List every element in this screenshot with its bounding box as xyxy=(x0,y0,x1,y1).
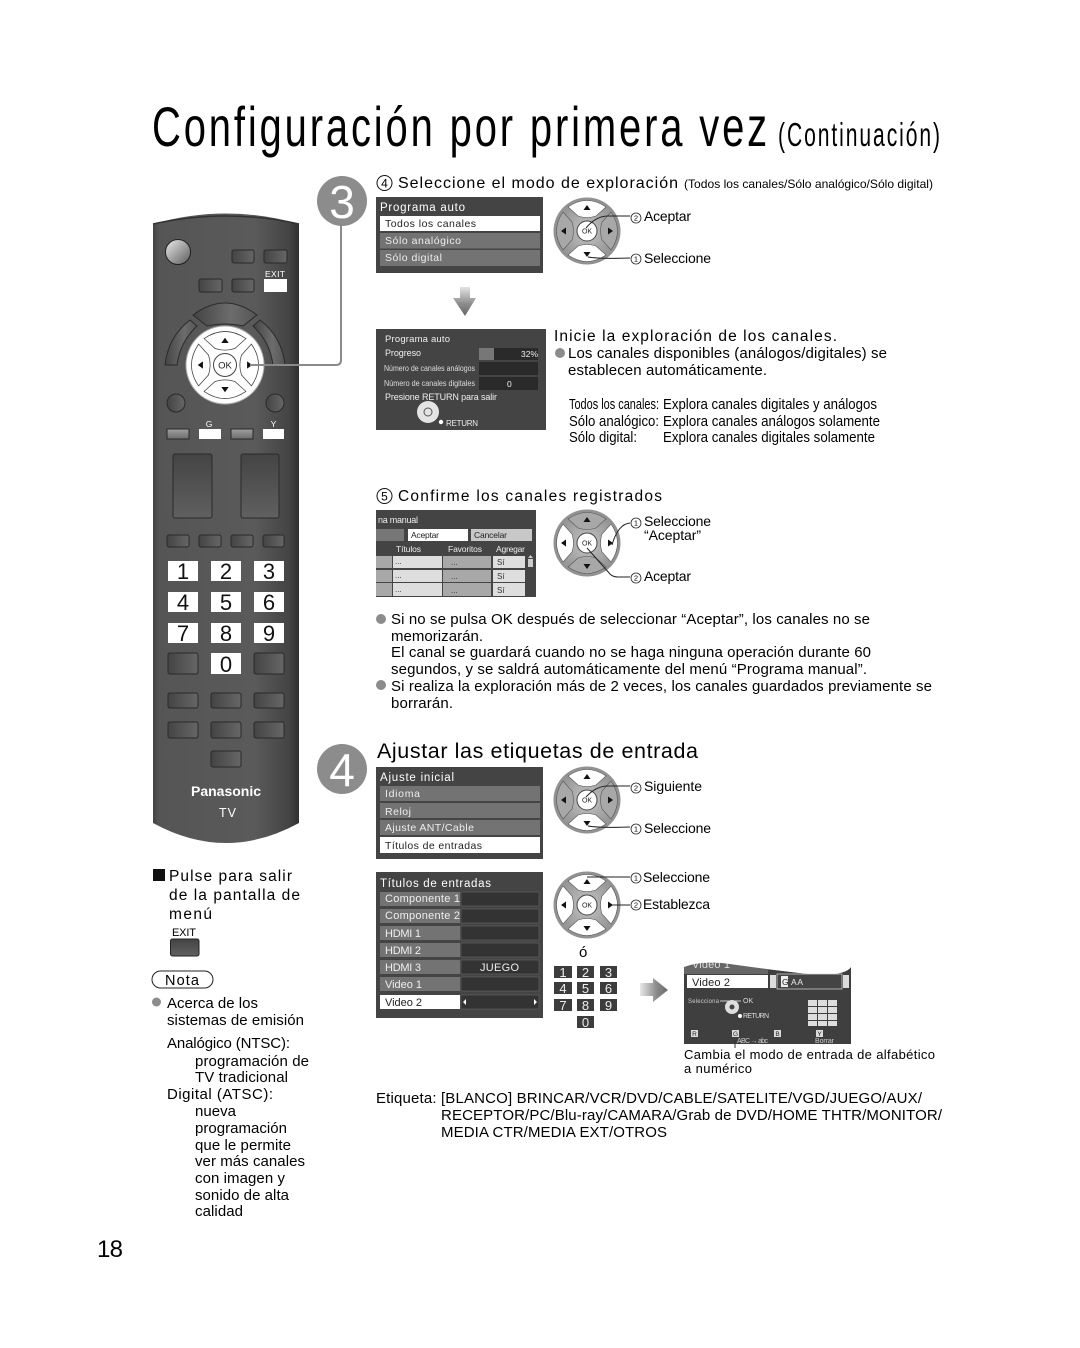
panel: manual program table: ... xyxy=(451,586,458,595)
callout: Aceptar: 2 xyxy=(634,574,638,582)
note badge: Nota xyxy=(165,973,200,989)
panel: Ajuste inicial menu: Ajuste ANT/Cable xyxy=(385,822,474,834)
text block: notes: Si realiza la exploración más de 2 veces, los canales guardados previamente se xyxy=(391,678,932,695)
text block: scan options xyxy=(569,396,880,446)
alternative text: ó xyxy=(579,944,587,961)
icon: dpad label edit: OK xyxy=(582,902,592,910)
panel: Programa auto menu: Sólo digital xyxy=(385,252,442,264)
step 4 badge xyxy=(317,744,367,796)
icon: dpad step 3: OK xyxy=(582,228,592,236)
text block: broadcast systems note xyxy=(152,995,309,1220)
text block: broadcast systems note: programación de xyxy=(195,1053,309,1070)
number keypad: 6 xyxy=(605,981,612,996)
text block: broadcast systems note: Acerca de los xyxy=(167,995,258,1012)
panel: Ajuste inicial menu: Títulos de entradas xyxy=(385,840,482,852)
text block: broadcast systems note: TV tradicional xyxy=(195,1069,288,1086)
panel: Títulos de entradas menu: HDMI 3 xyxy=(385,962,421,974)
text block: scan options: Explora canales digitales solamente xyxy=(663,429,875,446)
callout: Establezca: 2 xyxy=(634,900,638,910)
callout: Seleccione: Seleccione xyxy=(644,250,711,266)
text block: broadcast systems note: con imagen y xyxy=(195,1170,286,1187)
text block: labels list: RECEPTOR/PC/Blu-ray/CAMARA/Grab de DVD/HOME THTR/MONITOR/ xyxy=(441,1107,943,1124)
panel: Títulos de entradas menu: JUEGO xyxy=(480,962,519,974)
number keys: 6 xyxy=(263,590,275,615)
callout: Siguiente xyxy=(586,778,702,797)
panel: manual program table: Títulos xyxy=(396,544,421,554)
text block: notes: borrarán. xyxy=(391,695,453,712)
callout: Siguiente: 2 xyxy=(634,784,638,792)
panel: scan progress: Presione RETURN para salir xyxy=(385,392,497,402)
panel: Ajuste inicial menu: Idioma xyxy=(385,788,420,800)
callout: Aceptar: Aceptar xyxy=(644,568,691,584)
icon: dpad label edit xyxy=(554,872,620,938)
panel: manual program table xyxy=(376,510,536,597)
callout: Establezca xyxy=(612,896,710,912)
heading: select scan mode xyxy=(377,175,933,192)
text block: start scan xyxy=(554,328,887,379)
panel: scan progress: Programa auto xyxy=(385,334,450,345)
panel: scan progress: Número de canales digitales xyxy=(384,379,475,388)
brand: Panasonic xyxy=(191,784,262,799)
remote control xyxy=(153,214,299,843)
callout: Seleccione xyxy=(587,869,710,885)
number keys: 3 xyxy=(263,559,275,584)
icon: exit key xyxy=(170,927,199,956)
text block: notes: Si no se pulsa OK después de seleccionar “Aceptar”, los canales no se xyxy=(391,611,870,628)
page number: 18 xyxy=(97,1236,123,1263)
panel: label entry screen: RETURN xyxy=(743,1013,769,1020)
text block: exit instruction: Pulse para salir xyxy=(169,868,292,885)
heading: confirm channels: 5 xyxy=(381,490,388,504)
icon: dpad confirm xyxy=(554,510,620,576)
heading: select scan mode: 4 xyxy=(381,176,388,190)
exit key: EXIT xyxy=(265,269,285,279)
callout: Seleccione: 1 xyxy=(634,874,638,882)
callout: Aceptar: Aceptar xyxy=(644,208,691,224)
number keypad: 3 xyxy=(605,965,612,980)
callout: Seleccione: 1 xyxy=(634,824,638,834)
text block: notes: memorizarán. xyxy=(391,628,483,645)
panel: manual program table: ... xyxy=(451,572,458,581)
panel: manual program table: Agregar xyxy=(496,544,525,554)
callout: Seleccione: Seleccione xyxy=(643,869,710,885)
title: Configuración por primera vez xyxy=(152,95,770,158)
panel: Títulos de entradas menu: HDMI 1 xyxy=(385,928,421,940)
title: (Continuación) xyxy=(778,116,942,153)
text block: notes: El canal se guardará cuando no se haga ninguna operación durante 60 xyxy=(391,644,871,661)
panel: Programa auto menu: Sólo analógico xyxy=(385,235,461,247)
colour keys: Y xyxy=(271,419,277,429)
heading: select scan mode: (Todos los canales/Sólo analógico/Sólo digital) xyxy=(684,177,933,191)
panel: manual program table: na manual xyxy=(378,515,418,525)
text block: broadcast systems note: que le permite xyxy=(195,1137,291,1154)
panel: Programa auto menu: Programa auto xyxy=(380,202,465,214)
panel: label entry screen: Borrar xyxy=(815,1038,835,1045)
callout: Aceptar xyxy=(587,548,691,584)
icon: power button xyxy=(166,240,190,264)
callout: Seleccione Aceptar: 1 xyxy=(634,518,638,528)
panel: label entry screen: A A xyxy=(791,977,803,987)
panel: label entry screen: Video 2 xyxy=(692,977,730,989)
callout: Seleccione Aceptar: “Aceptar” xyxy=(644,527,701,543)
number keypad: 2 xyxy=(582,965,589,980)
step 3 badge: 3 xyxy=(329,176,355,228)
caption: input mode: a numérico xyxy=(684,1061,752,1076)
panel: Ajuste inicial menu: Reloj xyxy=(385,806,411,818)
panel: label entry screen: Y xyxy=(817,1031,822,1038)
number keypad: 8 xyxy=(582,998,589,1013)
text block: start scan: establecen automáticamente. xyxy=(568,362,767,379)
brand: TV xyxy=(219,806,237,820)
number keypad: 9 xyxy=(605,998,612,1013)
icon: dpad step 3 xyxy=(554,198,620,264)
callout: Siguiente: Siguiente xyxy=(644,778,702,794)
text block: broadcast systems note: ver más canales xyxy=(195,1153,305,1170)
callout: Establezca: Establezca xyxy=(643,896,710,912)
text block: exit instruction: de la pantalla de xyxy=(169,887,300,904)
panel: label entry screen: Selecciona xyxy=(688,999,720,1005)
number keypad: 0 xyxy=(582,1015,589,1030)
panel: Programa auto menu xyxy=(376,197,543,273)
text block: start scan: Inicie la exploración de los canales. xyxy=(554,328,837,345)
panel: manual program table: Favoritos xyxy=(448,544,482,554)
colour keys: G xyxy=(206,419,212,429)
panel: Títulos de entradas menu: HDMI 2 xyxy=(385,945,421,957)
text block: notes xyxy=(376,611,932,712)
text block: scan options: Explora canales digitales y análogos xyxy=(663,396,877,413)
panel: manual program table: ... xyxy=(395,571,402,580)
panel: Títulos de entradas menu xyxy=(376,872,543,1018)
panel: label entry screen: R xyxy=(692,1031,697,1038)
number keys xyxy=(168,559,284,677)
number keys: 2 xyxy=(220,559,232,584)
panel: Títulos de entradas menu: Títulos de entradas xyxy=(380,878,491,890)
number keys: 9 xyxy=(263,621,275,646)
number keypad: 7 xyxy=(559,998,567,1013)
callout: Seleccione Aceptar xyxy=(612,513,711,545)
callout: Seleccione: 1 xyxy=(634,254,638,264)
text block: broadcast systems note: sistemas de emisión xyxy=(167,1012,304,1029)
panel: manual program table: Aceptar xyxy=(411,530,439,540)
callout: Seleccione xyxy=(588,250,711,266)
arc keys xyxy=(165,303,285,365)
icon: dpad label select xyxy=(554,766,620,834)
panel: manual program table: ... xyxy=(395,557,402,566)
step 4 badge: 4 xyxy=(329,744,355,796)
text block: broadcast systems note: calidad xyxy=(195,1203,243,1220)
exit key xyxy=(264,269,287,292)
panel: label entry screen: G xyxy=(733,1031,738,1038)
arrow down xyxy=(453,287,476,316)
icon: exit key: EXIT xyxy=(172,927,196,939)
text block: start scan: Los canales disponibles (análogos/digitales) se xyxy=(568,345,887,362)
callout: Seleccione: Seleccione xyxy=(644,820,711,836)
caption: input mode xyxy=(684,1047,935,1076)
panel: Ajuste inicial menu: Ajuste inicial xyxy=(380,772,454,784)
panel: label entry screen xyxy=(684,955,851,1048)
panel: Títulos de entradas menu: Componente 2 xyxy=(385,910,460,922)
text block: broadcast systems note: Digital (ATSC): xyxy=(167,1086,273,1103)
brand xyxy=(191,784,262,820)
text block: scan options: Sólo analógico: xyxy=(569,413,659,430)
panel: scan progress: 32% xyxy=(521,349,538,359)
note badge xyxy=(152,971,213,989)
number keys: 5 xyxy=(220,590,232,615)
panel: label entry screen: B xyxy=(775,1031,780,1038)
panel: manual program table: ... xyxy=(395,585,402,594)
icon: dpad confirm: OK xyxy=(582,540,592,548)
panel: Títulos de entradas menu: Video 2 xyxy=(385,997,422,1009)
heading: adjust input labels: Ajustar las etiquetas de entrada xyxy=(377,739,698,763)
number keys: 0 xyxy=(220,652,232,677)
panel: manual program table: Sí xyxy=(497,586,505,595)
text block: broadcast systems note: Analógico (NTSC): xyxy=(167,1035,290,1052)
panel: label entry screen: Video 1 xyxy=(692,959,730,971)
panel: scan progress: RETURN xyxy=(446,419,478,428)
panel: manual program table: ... xyxy=(451,558,458,567)
heading: confirm channels: Confirme los canales registrados xyxy=(398,488,662,505)
number keypad: 5 xyxy=(582,981,589,996)
text block: exit instruction xyxy=(153,868,300,923)
step 3 badge xyxy=(317,176,367,228)
panel: manual program table: Sí xyxy=(497,572,505,581)
navigation pad xyxy=(186,326,264,404)
text block: labels list xyxy=(376,1090,943,1141)
panel: Ajuste inicial menu xyxy=(376,767,543,859)
number keypad xyxy=(554,965,617,1030)
callout: Seleccione xyxy=(588,820,711,836)
text block: scan options: Explora canales análogos solamente xyxy=(663,413,880,430)
arrow right xyxy=(640,978,668,1002)
text block: labels list: MEDIA CTR/MEDIA EXT/OTROS xyxy=(441,1124,667,1141)
panel: label entry screen: ABC → abc xyxy=(737,1038,768,1045)
text block: notes: segundos, y se saldrá automáticamente del menú “Programa manual”. xyxy=(391,661,867,678)
panel: Programa auto menu: Todos los canales xyxy=(385,218,476,230)
number keys: 4 xyxy=(177,590,189,615)
panel: manual program table: Sí xyxy=(497,558,505,567)
panel: Títulos de entradas menu: Video 1 xyxy=(385,979,422,991)
rocker keys xyxy=(173,454,279,518)
panel: label entry screen: G xyxy=(782,977,789,987)
number keypad: 4 xyxy=(559,981,567,996)
panel: scan progress: Número de canales análogos xyxy=(384,364,475,373)
panel: scan progress xyxy=(376,329,546,430)
callout: Aceptar: 2 xyxy=(634,214,638,222)
navigation pad: OK xyxy=(218,360,233,372)
text block: labels list: Etiqueta: [BLANCO] BRINCAR/VCR/DVD/CABLE/SATELITE/VGD/JUEGO/AUX/ xyxy=(376,1090,923,1107)
number keys: 8 xyxy=(220,621,232,646)
panel: scan progress: Progreso xyxy=(385,348,421,358)
colour keys xyxy=(167,419,284,439)
panel: Títulos de entradas menu: Componente 1 xyxy=(385,893,460,905)
text block: scan options: Todos los canales: xyxy=(569,396,659,413)
text block: scan options: Sólo digital: xyxy=(569,429,637,446)
number keys: 1 xyxy=(177,559,189,584)
panel: manual program table: Cancelar xyxy=(474,530,507,540)
panel: label entry screen: OK xyxy=(743,998,753,1005)
text block: broadcast systems note: nueva xyxy=(195,1103,237,1120)
number keypad: 1 xyxy=(559,965,567,980)
text block: exit instruction: menú xyxy=(169,906,212,923)
caption: input mode: Cambia el modo de entrada de alfabético xyxy=(684,1047,935,1062)
heading: select scan mode: Seleccione el modo de exploración xyxy=(398,175,678,192)
icon: dpad label select: OK xyxy=(582,798,592,804)
text block: broadcast systems note: sonido de alta xyxy=(195,1187,290,1204)
callout: Seleccione Aceptar: Seleccione xyxy=(644,513,711,529)
callout: Aceptar xyxy=(586,208,691,228)
text block: broadcast systems note: programación xyxy=(195,1120,287,1137)
panel: scan progress: 0 xyxy=(507,379,512,389)
connector arrow from remote to step 3 xyxy=(250,220,341,365)
top buttons xyxy=(199,250,287,292)
number keys: 7 xyxy=(177,621,189,646)
